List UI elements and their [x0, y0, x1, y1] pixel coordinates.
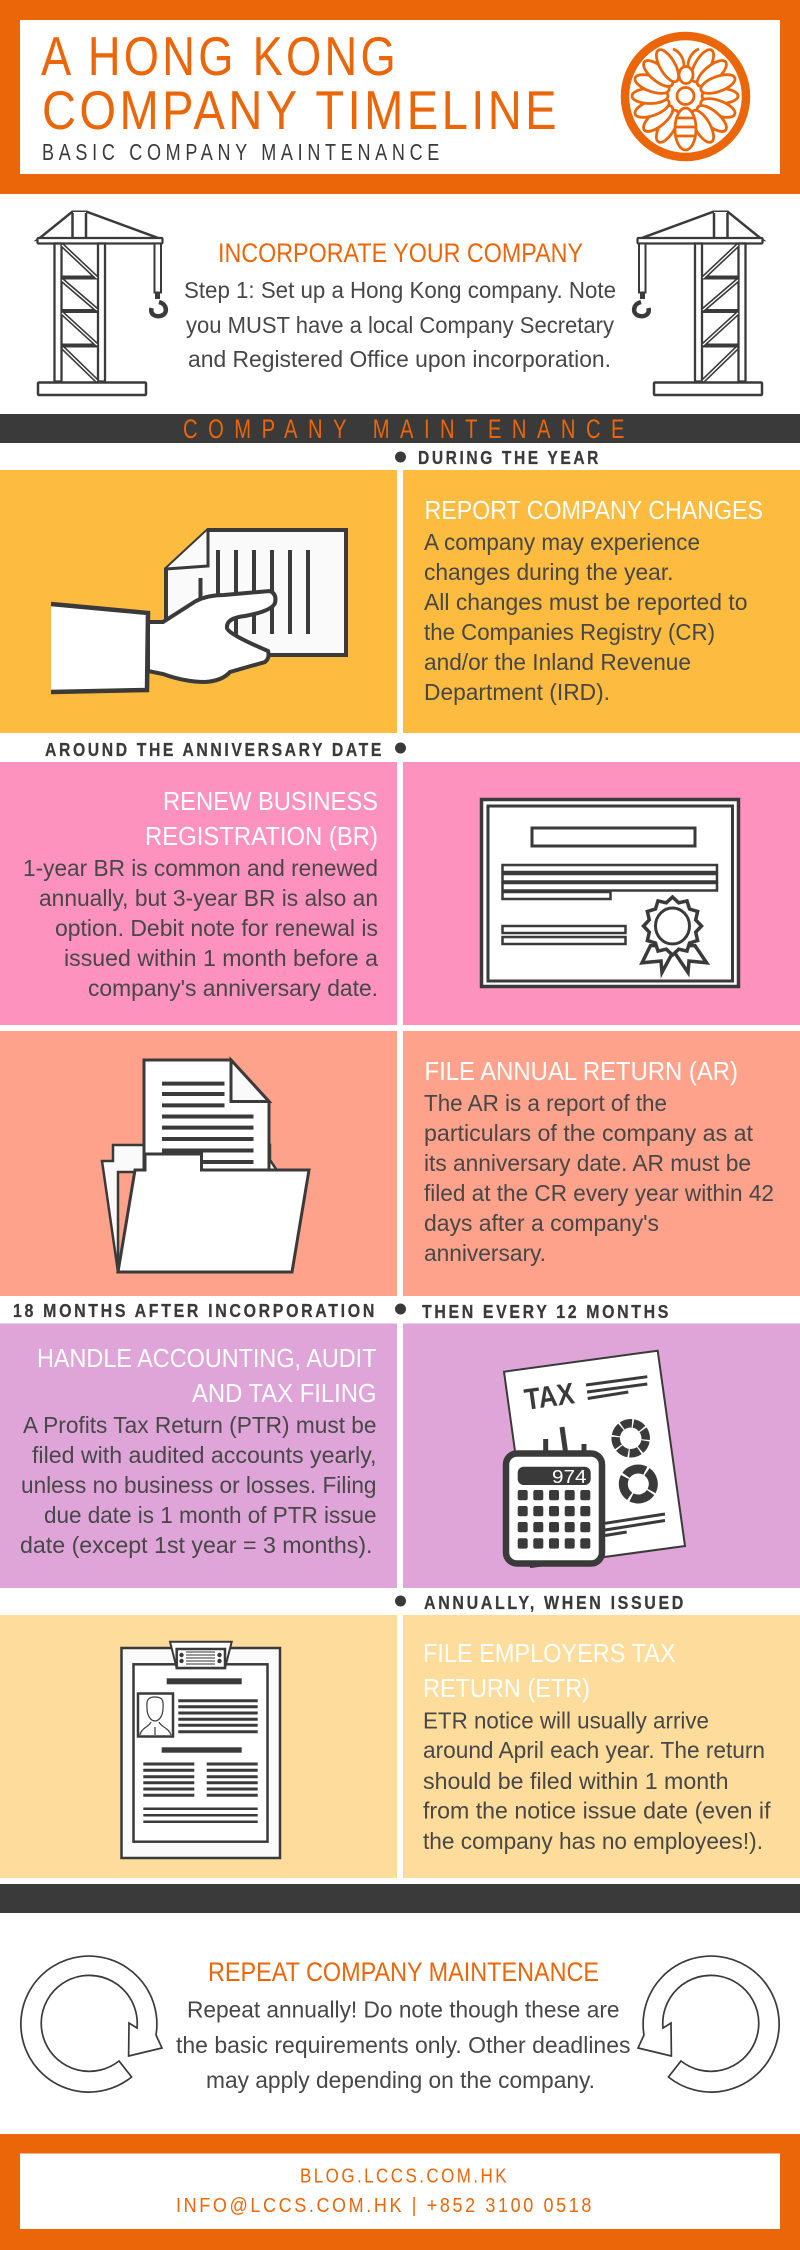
footer contact text: INFO@LCCS.COM.HK | +852 3100 0518	[176, 2194, 594, 2217]
footer contact text	[176, 2164, 594, 2217]
section bar: company maintenance: COMPANY MAINTENANCE	[183, 414, 635, 444]
timeline label: around the anniversary date: AROUND THE ANNIVERSARY DATE	[45, 740, 384, 760]
text block: should be filed within 1 month	[423, 1768, 728, 1794]
heading: REPEAT COMPANY MAINTENANCE	[208, 1957, 599, 1987]
divider bar	[0, 1884, 800, 1913]
text block: company's anniversary date.	[88, 975, 378, 1001]
text block: from the notice issue date (even if	[423, 1798, 771, 1824]
icon: tax form and calculator: 974	[552, 1467, 586, 1487]
text block: days after a company's	[424, 1210, 659, 1236]
icon: right cycle arrow	[638, 1956, 779, 2092]
heading	[423, 1638, 676, 1703]
text block: the company has no employees!).	[423, 1828, 763, 1854]
timeline label: during the year: DURING THE YEAR	[418, 448, 601, 468]
icon: bee flower logo	[625, 36, 746, 157]
icon: tax form and calculator	[504, 1351, 685, 1567]
text block: and/or the Inland Revenue	[424, 649, 691, 675]
heading: INCORPORATE YOUR COMPANY	[218, 238, 583, 268]
heading	[145, 786, 378, 851]
heading: FILE ANNUAL RETURN (AR)	[424, 1056, 738, 1086]
heading	[37, 1343, 377, 1408]
text block: Repeat annually! Do note though these are	[187, 1996, 620, 2022]
text block: unless no business or losses. Filing	[21, 1472, 376, 1498]
text block	[23, 855, 379, 1001]
panel: file employers tax return	[0, 1615, 800, 1878]
panel: report company changes	[0, 470, 800, 733]
heading: RETURN (ETR)	[423, 1673, 590, 1703]
icon: clipboard with resume	[122, 1642, 280, 1858]
text block: option. Debit note for renewal is	[55, 915, 378, 941]
icon: folder with documents	[102, 1060, 309, 1272]
timeline label: annually, when issued: ANNUALLY, WHEN ISSUED	[424, 1593, 686, 1613]
text block: A company may experience	[424, 529, 700, 555]
text block: Step 1: Set up a Hong Kong company. Note	[184, 277, 616, 303]
text block: ETR notice will usually arrive	[423, 1708, 709, 1734]
footer	[0, 2134, 800, 2250]
icon: left cycle arrow	[21, 1956, 162, 2092]
panel: renew business registration	[0, 762, 800, 1025]
text block: particulars of the company as at	[424, 1120, 753, 1146]
subtitle: BASIC COMPANY MAINTENANCE	[42, 139, 444, 165]
text block	[176, 1996, 630, 2093]
icon: hand holding document	[51, 530, 346, 692]
text block: The AR is a report of the	[424, 1090, 667, 1116]
text block: anniversary.	[424, 1240, 546, 1266]
text block: issued within 1 month before a	[64, 945, 379, 971]
text block: annually, but 3-year BR is also an	[39, 885, 378, 911]
footer contact text: BLOG.LCCS.COM.HK	[300, 2164, 509, 2188]
text block: filed with audited accounts yearly,	[32, 1442, 376, 1468]
text block: All changes must be reported to	[424, 589, 748, 615]
icon: right crane	[634, 212, 763, 395]
text block	[184, 277, 616, 372]
timeline label: 18 months after incorporation: THEN EVERY 12 MONTHS	[422, 1302, 671, 1322]
text block: A Profits Tax Return (PTR) must be	[23, 1412, 376, 1438]
heading: REPORT COMPANY CHANGES	[424, 495, 763, 525]
panel: accounting, audit and tax filing	[0, 1324, 800, 1588]
icon: certificate	[482, 800, 738, 986]
heading: AND TAX FILING	[192, 1378, 376, 1408]
text block	[423, 1708, 771, 1854]
heading: RENEW BUSINESS	[163, 786, 378, 816]
text block: the Companies Registry (CR)	[424, 619, 715, 645]
timeline label: 18 months after incorporation	[13, 1301, 671, 1322]
text block: around April each year. The return	[423, 1737, 765, 1763]
text block: the basic requirements only. Other deadlines	[176, 2032, 630, 2058]
timeline label: 18 months after incorporation: 18 MONTHS AFTER INCORPORATION	[13, 1301, 377, 1321]
text block: due date is 1 month of PTR issue	[44, 1502, 376, 1528]
text block: you MUST have a local Company Secretary	[186, 312, 614, 338]
heading: HANDLE ACCOUNTING, AUDIT	[37, 1343, 377, 1373]
title	[41, 25, 560, 141]
title: A HONG KONG	[41, 25, 399, 87]
icon: tax form and calculator: TAX	[522, 1377, 576, 1417]
text block	[424, 1090, 774, 1266]
text block: and Registered Office upon incorporation.	[188, 346, 611, 372]
text block	[424, 529, 748, 705]
text block: its anniversary date. AR must be	[424, 1150, 751, 1176]
panel: file annual return	[0, 1031, 800, 1296]
text block	[20, 1412, 376, 1558]
header banner	[0, 0, 800, 194]
title: COMPANY TIMELINE	[42, 79, 560, 141]
panel: repeat company maintenance	[21, 1956, 779, 2093]
text block: may apply depending on the company.	[206, 2067, 595, 2093]
text block: changes during the year.	[424, 559, 674, 585]
heading: REGISTRATION (BR)	[145, 821, 378, 851]
text block: 1-year BR is common and renewed	[23, 855, 378, 881]
text block: date (except 1st year = 3 months).	[20, 1532, 372, 1558]
icon: left crane	[37, 212, 166, 395]
panel: incorporate your company	[37, 212, 763, 395]
heading: FILE EMPLOYERS TAX	[423, 1638, 676, 1668]
text block: Department (IRD).	[424, 679, 610, 705]
text block: filed at the CR every year within 42	[424, 1180, 774, 1206]
